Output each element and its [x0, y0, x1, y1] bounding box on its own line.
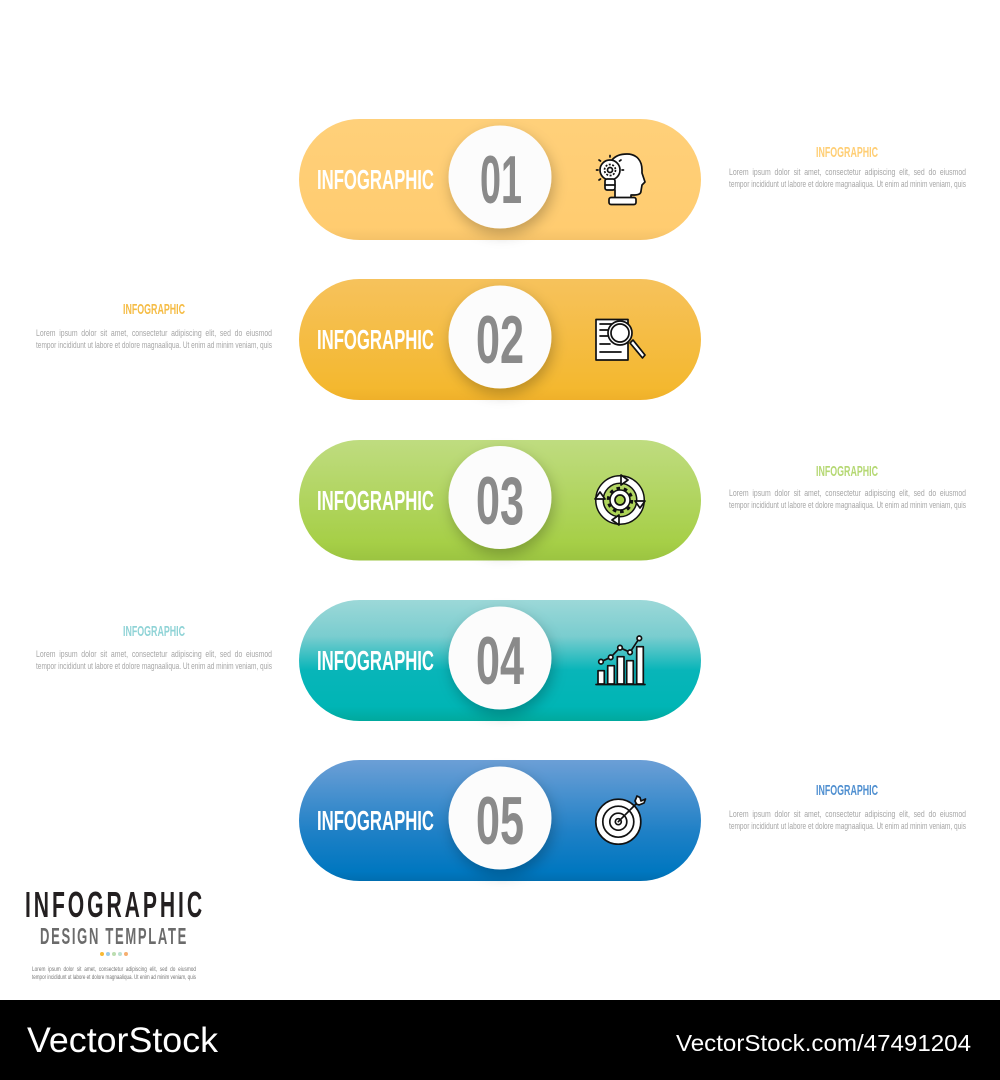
text block: step 03 description: INFOGRAPHIC: [816, 463, 878, 480]
panel: step 02: [299, 279, 701, 400]
number circle 01: [448, 126, 552, 228]
text block: step 02 description: INFOGRAPHIC: [123, 301, 185, 318]
number circle 05: 05: [476, 783, 524, 859]
text block: step 04 description: [36, 623, 272, 672]
text block: step 04 description: INFOGRAPHIC: [123, 623, 185, 640]
text block: step 02 description: [36, 301, 272, 351]
label 02: INFOGRAPHIC: [317, 324, 434, 355]
text block: step 04 description: tempor incididunt ut labore et dolore magnaaliqua. Ut enim ad minim veniam, quis: [36, 661, 272, 672]
pill 02: [299, 279, 701, 400]
intro text: Lorem ipsum dolor sit amet, consectetur adipiscing elit, sed do eiusmod: [32, 966, 196, 973]
text block: step 05 description: INFOGRAPHIC: [816, 782, 878, 799]
icon: gear with cycle arrows: [595, 475, 645, 525]
text block: step 01 description: [729, 144, 966, 190]
icon: target with arrow: [596, 796, 646, 844]
label 04: INFOGRAPHIC: [317, 645, 434, 676]
panel: step 01: [299, 119, 701, 240]
number circle 05: [448, 766, 552, 870]
panel: step 05: [299, 760, 701, 881]
intro text: [32, 966, 197, 981]
text block: step 05 description: [729, 782, 966, 832]
panel: step 04: [299, 600, 701, 721]
number circle 04: [448, 606, 552, 710]
icon: document and magnifier: [596, 320, 645, 360]
title: INFOGRAPHIC: [25, 884, 205, 925]
label 05: INFOGRAPHIC: [317, 805, 434, 836]
title block: [25, 884, 205, 981]
text block: step 02 description: tempor incididunt ut labore et dolore magnaaliqua. Ut enim ad minim veniam, quis: [36, 340, 272, 351]
number circle 04: 04: [476, 623, 524, 699]
label 01: INFOGRAPHIC: [317, 164, 434, 195]
panel: step 03: [299, 440, 701, 560]
intro text: tempor incididunt ut labore et dolore magnaaliqua. Ut enim ad minim veniam, quis: [32, 974, 197, 981]
icon: head with light bulb: [596, 154, 645, 204]
text block: step 02 description: Lorem ipsum dolor sit amet, consectetur adipiscing elit, sed do eiusmod: [36, 328, 272, 339]
pill 03: [299, 440, 701, 560]
number circle 02: [448, 286, 552, 388]
pill 01: [299, 119, 701, 240]
number circle 03: 03: [476, 463, 524, 539]
colour dots: [100, 952, 128, 956]
number circle 01: 01: [480, 142, 522, 218]
number circle 03: [448, 446, 552, 549]
footer image id: VectorStock.com/47491204: [676, 1030, 971, 1056]
pill 05: [299, 760, 701, 881]
text block: step 01 description: INFOGRAPHIC: [816, 144, 878, 161]
label 03: INFOGRAPHIC: [317, 485, 434, 516]
footer band: [0, 1000, 1000, 1080]
text block: step 03 description: [729, 463, 966, 511]
icon: rising bar chart: [596, 636, 645, 684]
pill 04: [299, 600, 701, 721]
footer brand: VectorStock: [27, 1021, 219, 1060]
number circle 02: 02: [476, 302, 524, 378]
text block: step 04 description: Lorem ipsum dolor sit amet, consectetur adipiscing elit, sed do eiusmod: [36, 649, 272, 660]
subtitle: DESIGN TEMPLATE: [40, 923, 188, 949]
